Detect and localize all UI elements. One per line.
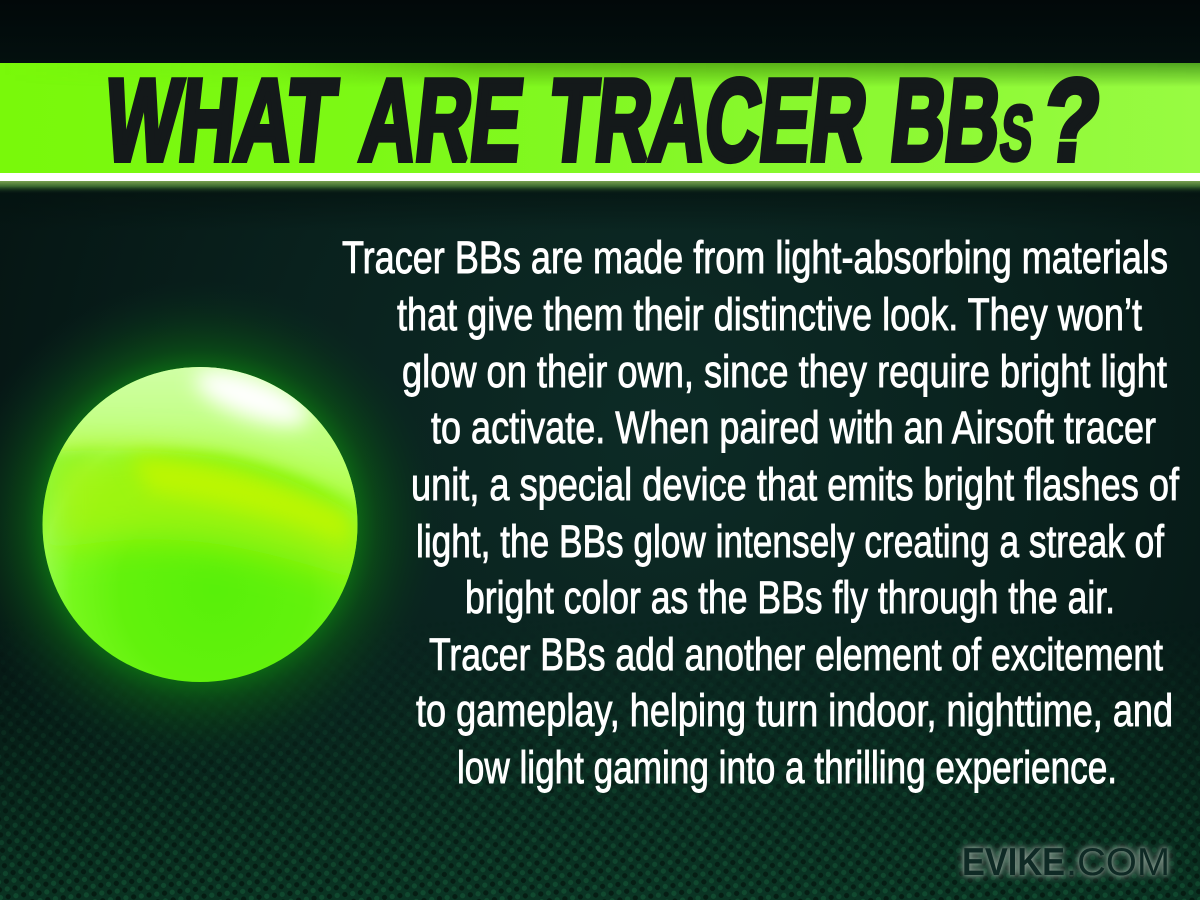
title banner bbox=[0, 55, 1200, 185]
title: BB bbox=[885, 55, 1007, 185]
watermark: EVIKE.COM bbox=[962, 841, 1170, 884]
body text bbox=[342, 232, 1179, 793]
title bbox=[99, 55, 1107, 185]
title: ARE bbox=[355, 55, 529, 185]
icon: glowing tracer BB bbox=[0, 308, 412, 742]
watermark: EVIKE.COM: .COM bbox=[1066, 841, 1170, 884]
watermark: EVIKE.COM: EVIKE bbox=[962, 841, 1065, 884]
title: TRACER bbox=[543, 55, 873, 185]
title: ? bbox=[1037, 55, 1107, 185]
title: S bbox=[996, 89, 1037, 177]
title: WHAT bbox=[99, 55, 342, 185]
